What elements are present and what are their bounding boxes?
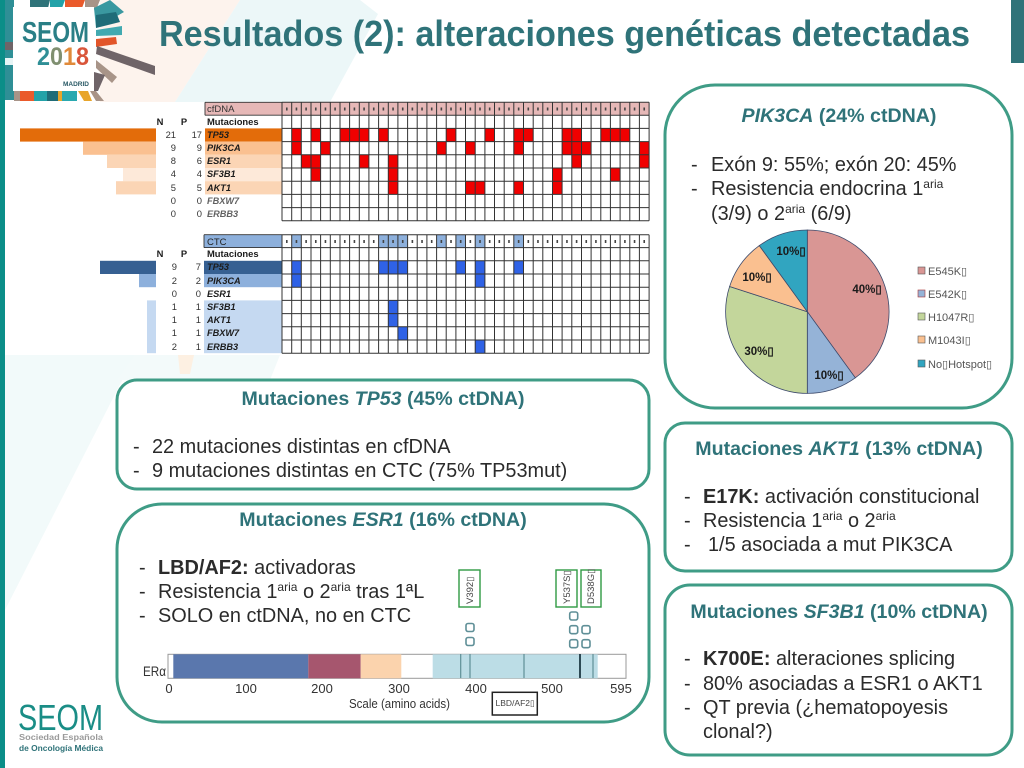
text: SF3B1 findings: QT previa (¿hematopoyesis [703,697,948,719]
text: SF3B1 findings: clonal?) [703,721,773,743]
CTC counts: 0 [172,288,177,299]
panel: AKT1 [665,423,1012,571]
diagram: ER alpha domains: Scale (amino acids) [349,696,450,711]
CTC counts: 1 [196,301,201,312]
cfDNA counts: 8 [171,155,176,166]
pie legend: M1043I▯ [928,335,971,347]
text: ESR1 findings: aria [277,580,298,594]
callout: LBD/AF2 [492,692,537,715]
text: AKT1 findings: o 2 [842,510,876,532]
text: ESR1 findings: - [139,581,146,603]
left teal stripe [0,0,5,768]
callout: D538G [581,569,601,607]
text: SF3B1 findings: 80% asociadas a ESR1 o AKT1 [703,673,983,695]
text: PIK3CA findings: Exón 9: 55%; exón 20: 45% [711,154,956,176]
panel: ESR1 [117,504,649,722]
text: AKT1 findings: aria [822,509,843,523]
text: TP53 findings: 9 mutaciones distintas en CTC (75% TP53mut) [152,460,567,482]
CTC counts: P [181,248,187,259]
text: SF3B1 findings [684,648,983,743]
CTC counts: 1 [172,327,177,338]
cfDNA gene labels: FBXW7 [207,196,240,206]
cfDNA gene labels: TP53 [207,130,229,140]
text: AKT1 findings: aria [876,509,896,523]
text: ESR1 findings: tras 1ªL [351,581,424,603]
CTC gene labels: Mutaciones [207,248,259,259]
pie legend: E545K▯ [928,266,967,278]
text: AKT1 findings: Resistencia 1 [703,510,822,532]
CTC gene labels: TP53 [207,262,229,272]
text: PIK3CA findings: (6/9) [805,203,852,225]
pie labels: 10%▯ [742,272,772,284]
callout: LBD/AF2: LBD/AF2▯ [496,698,535,708]
text: AKT1 findings: E17K: activación constitucional [703,486,979,508]
CTC counts: 1 [172,301,177,312]
cfDNA gene labels: AKT1 [206,183,231,193]
CTC grid [282,235,649,353]
cfDNA counts: N [157,116,164,127]
axis labels: 0 [165,681,173,696]
cfDNA counts: 17 [192,129,202,140]
cfDNA counts: 0 [171,195,176,206]
CTC counts: 1 [172,314,177,325]
text: PIK3CA findings [691,154,956,225]
axis labels: 300 [388,681,410,696]
text: ESR1 findings: SOLO en ctDNA, no en CTC [158,605,411,627]
logo: SEOM 2018 Madrid: MADRID [63,82,90,88]
logo: SEOM society [18,697,103,753]
cfDNA counts: 9 [197,142,202,153]
CTC counts [157,248,201,352]
cfDNA gene labels: ESR1 [207,156,231,166]
text: ESR1 findings: o 2 [297,581,331,603]
text: PIK3CA findings: Resistencia endocrina 1 [711,178,923,200]
text: SF3B1 findings: K700E: alteraciones splicing [703,648,955,670]
text: TP53 findings: - [133,460,140,482]
cfDNA counts: 4 [197,168,202,179]
CTC counts: 9 [172,261,177,272]
text: PIK3CA findings: - [691,154,698,176]
cfDNA counts: 0 [171,208,176,219]
text: ESR1 findings: - [139,605,146,627]
CTC gene labels: CTC [207,237,227,248]
pie labels: 10%▯ [776,246,806,258]
diagram: ER alpha domains [143,654,632,711]
heading: ESR1: Mutaciones ESR1 (16% ctDNA) [239,509,527,531]
text: ESR1 findings [139,557,424,627]
text: PIK3CA findings: (3/9) o 2 [711,203,785,225]
CTC counts: 0 [196,288,201,299]
pie legend: H1047R▯ [928,312,974,324]
text: SF3B1 findings: - [684,648,691,670]
text: AKT1 findings: - [684,510,691,532]
CTC counts: 2 [196,275,201,286]
CTC gene labels: ESR1 [207,289,231,299]
heading: PIK3CA: PIK3CA (24% ctDNA) [742,105,936,127]
mutation markers [466,612,590,648]
pie legend [918,266,992,371]
CTC gene labels [204,235,282,353]
text: AKT1 findings: 1/5 asociada a mut PIK3CA [708,534,953,556]
CTC counts: 1 [196,341,201,352]
logo: SEOM 2018 Madrid: 2018 [37,43,89,71]
cfDNA counts: 9 [171,142,176,153]
title: Resultados (2): alteraciones genéticas detectadas [159,13,970,54]
CTC gene labels: ERBB3 [207,342,238,352]
CTC bars [100,261,156,353]
cfDNA counts: 0 [197,195,202,206]
logo: SEOM society: Sociedad Española [19,732,103,742]
table: cfDNA oncoprint [12,102,650,222]
cfDNA counts: 21 [166,129,176,140]
text: AKT1 findings [684,486,979,556]
axis labels: 100 [235,681,257,696]
CTC header cells [292,235,524,248]
callout: Y537S: Y537S▯ [562,570,573,604]
heading: TP53: Mutaciones TP53 (45% ctDNA) [241,388,525,410]
text: SF3B1 findings: - [684,697,691,719]
cfDNA counts: 6 [197,155,202,166]
cfDNA bars [20,128,156,194]
axis labels: 500 [541,681,563,696]
logo: SEOM society: de Oncología Médica [19,743,103,753]
cfDNA gene labels: SF3B1 [207,169,236,179]
text: ESR1 findings: - [139,557,146,579]
cfDNA grid [282,102,649,221]
CTC mutation cells [292,261,524,353]
axis labels: 400 [465,681,487,696]
table: CTC oncoprint [90,234,650,354]
cfDNA mutation cells [292,128,649,194]
text: ESR1 findings: aria [331,580,351,594]
pie labels: 30%▯ [744,346,774,358]
text: TP53 findings [133,436,567,482]
logo: SEOM 2018 Madrid [5,0,155,101]
pie labels [742,246,882,382]
callout: Y537S [556,570,577,607]
cfDNA gene labels [205,102,282,219]
text: AKT1 findings: - [684,534,691,556]
text: PIK3CA findings: - [691,178,698,200]
text: PIK3CA findings: aria [785,202,805,216]
CTC gene labels: PIK3CA [207,276,241,286]
cfDNA counts: 4 [171,168,176,179]
text: TP53 findings: - [133,436,140,458]
callout: V392 [459,570,480,607]
cfDNA gene labels: PIK3CA [207,143,241,153]
panel: PIK3CA [665,85,1012,408]
pie legend: E542K▯ [928,289,967,301]
CTC counts: 1 [196,327,201,338]
pie labels: 10%▯ [814,370,844,382]
heading: SF3B1: Mutaciones SF3B1 (10% ctDNA) [690,601,988,623]
CTC counts: 2 [172,275,177,286]
logo: SEOM society: SEOM [18,697,103,738]
text: SF3B1 findings: - [684,673,691,695]
cfDNA counts: P [181,116,187,127]
CTC counts: 2 [172,341,177,352]
cfDNA counts: 5 [171,182,176,193]
pie legend: No▯Hotspot▯ [928,359,992,371]
axis labels: 595 [610,681,632,696]
text: PIK3CA findings: aria [923,177,944,191]
CTC gene labels: SF3B1 [207,302,236,312]
cfDNA counts [157,116,202,219]
cfDNA counts: 0 [197,208,202,219]
cfDNA gene labels: Mutaciones [207,116,259,127]
cfDNA gene labels: cfDNA [207,104,235,115]
CTC gene labels: AKT1 [206,315,231,325]
CTC counts: N [157,248,164,259]
CTC gene labels: FBXW7 [207,328,240,338]
axis labels [165,681,632,696]
logo: SEOM 2018 Madrid: SEOM [22,17,89,49]
text: TP53 findings: 22 mutaciones distintas en cfDNA [152,436,451,458]
heading: AKT1: Mutaciones AKT1 (13% ctDNA) [695,438,983,460]
text: ESR1 findings: LBD/AF2: activadoras [158,557,356,579]
panel: SF3B1 [665,585,1012,755]
CTC counts: 1 [196,314,201,325]
cfDNA gene labels: ERBB3 [207,209,238,219]
pie labels: 40%▯ [852,284,882,296]
top right teal bar [1011,0,1024,63]
panel: TP53 [117,380,649,489]
text: AKT1 findings: - [684,486,691,508]
pie chart: PIK3CA hotspots [726,230,889,393]
text: ESR1 findings: Resistencia 1 [158,581,277,603]
axis labels: 200 [311,681,333,696]
callout: V392: V392▯ [465,577,476,604]
CTC counts: 7 [196,261,201,272]
cfDNA header cells [282,102,649,115]
callout: D538G: D538G▯ [586,569,597,604]
diagram: ER alpha domains: ERα [143,663,166,679]
cfDNA counts: 5 [197,182,202,193]
